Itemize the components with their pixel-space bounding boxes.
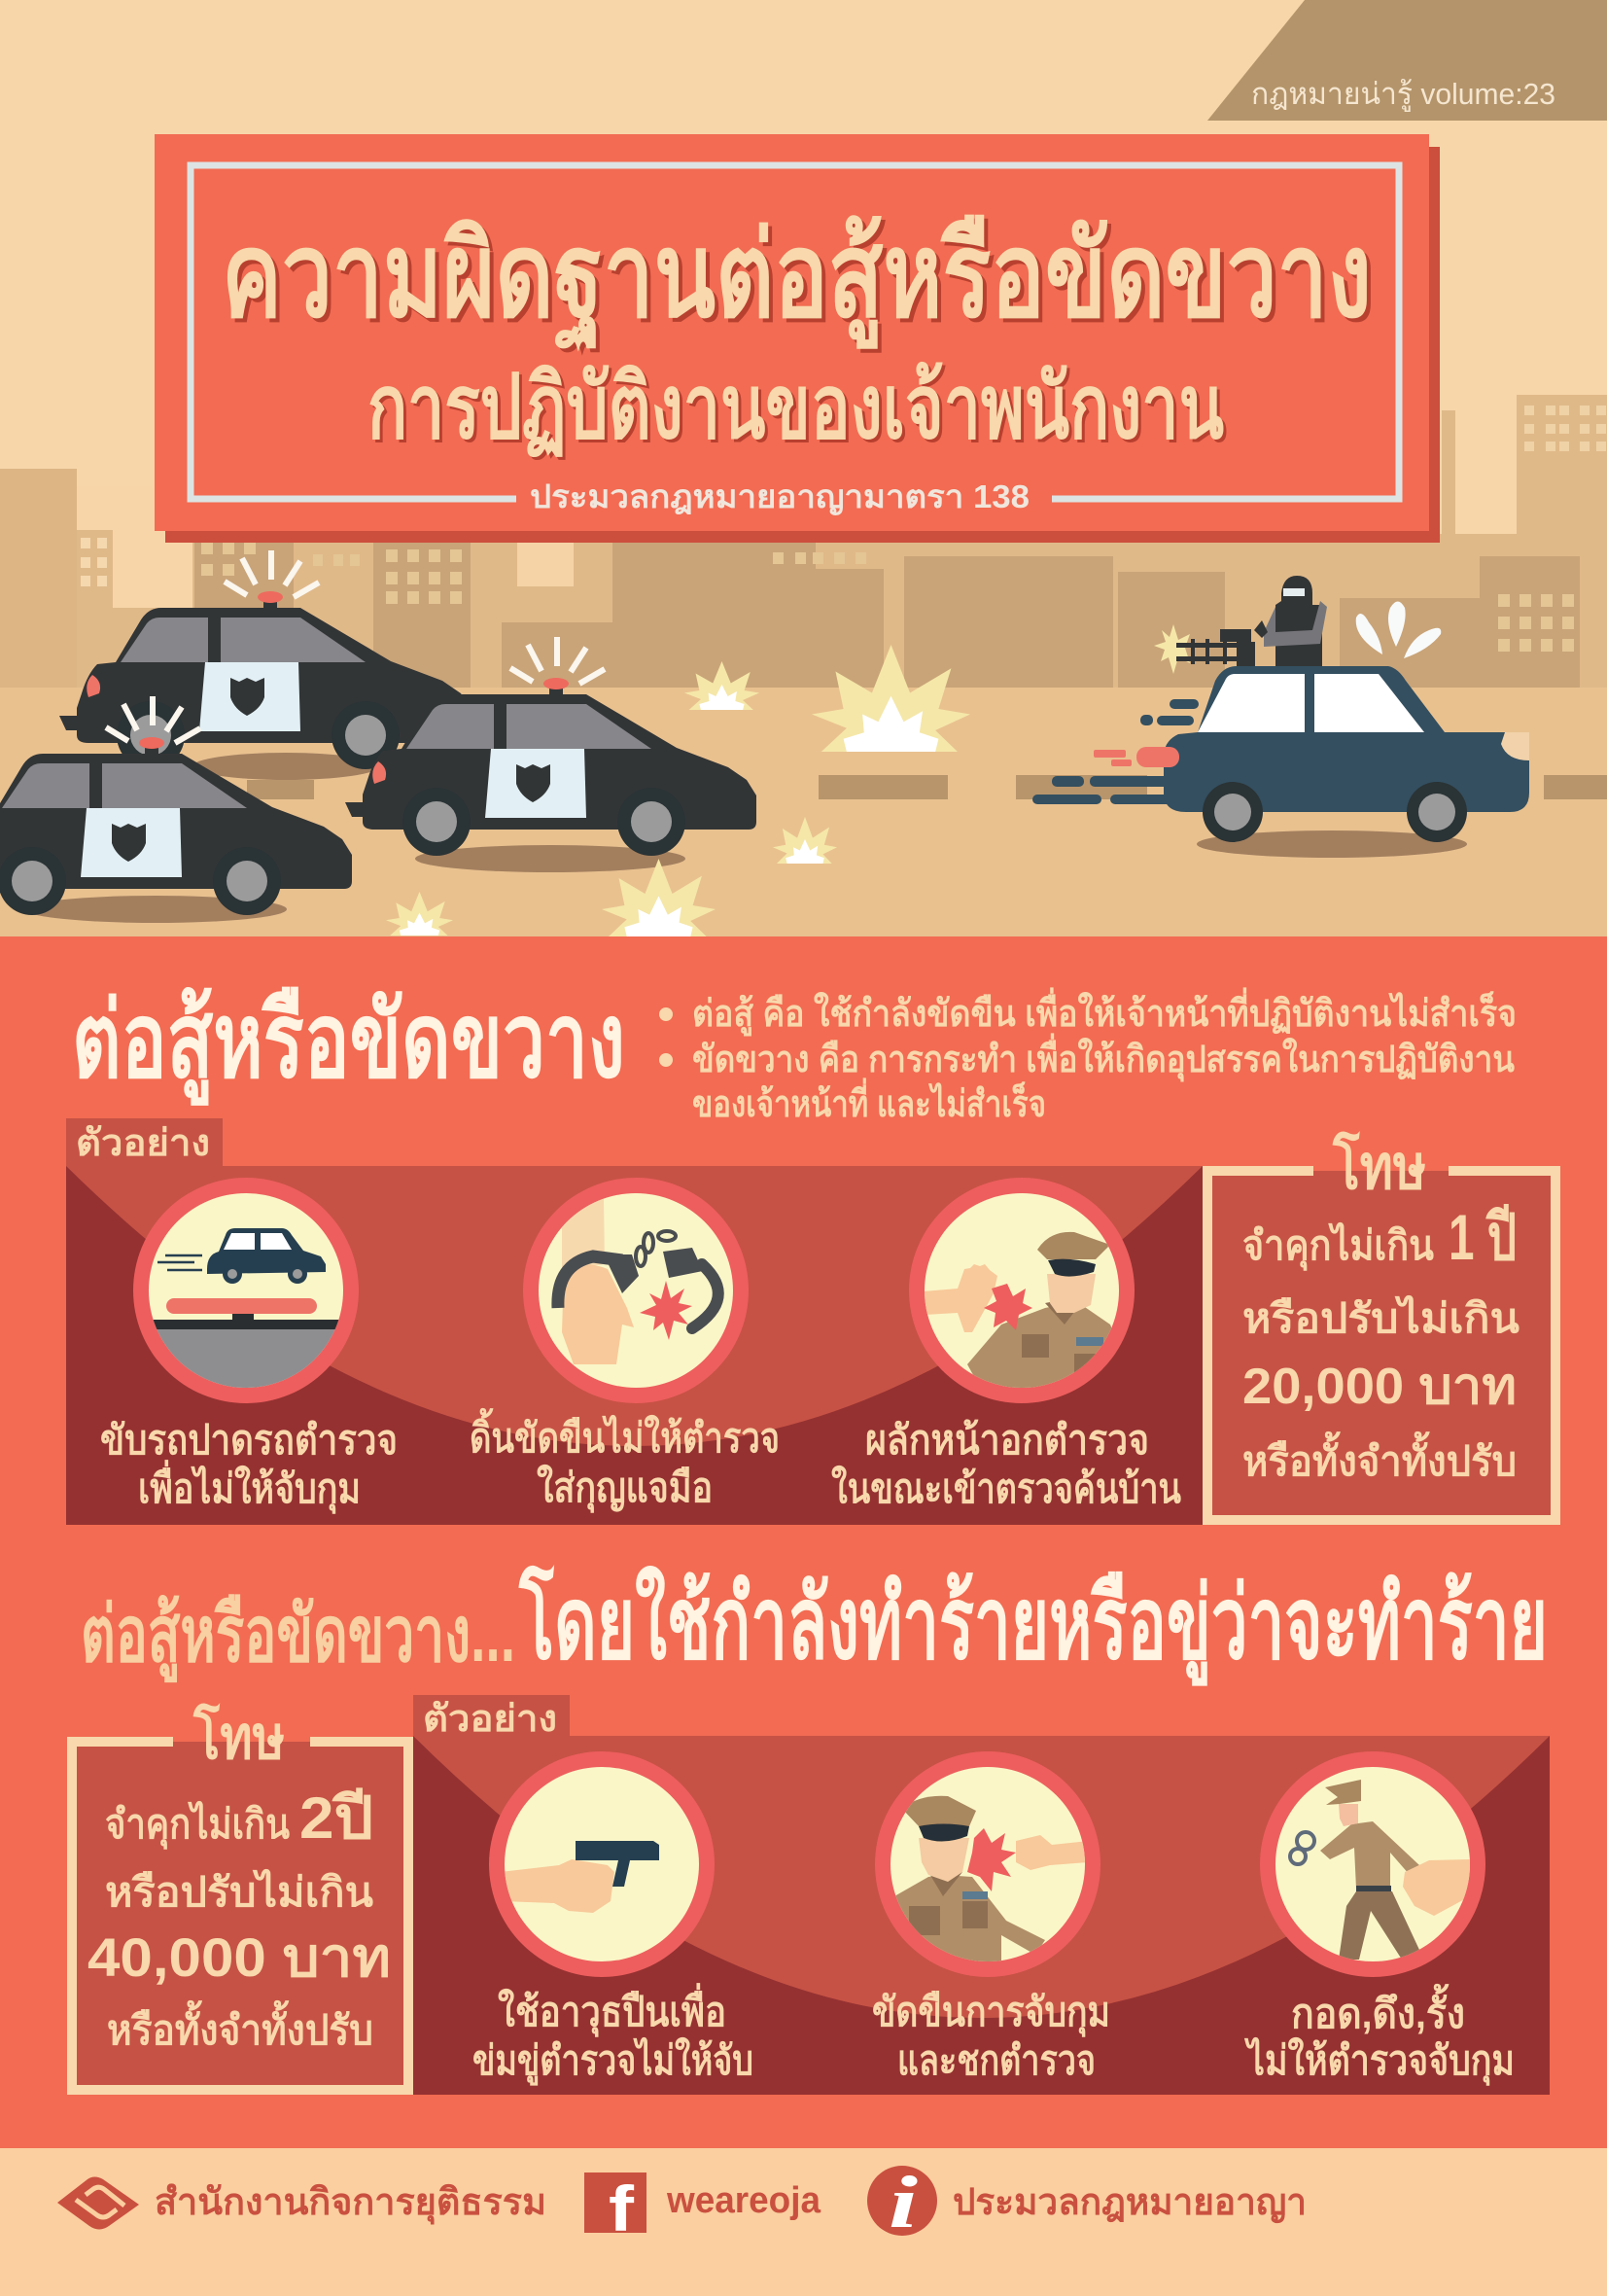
icon: officer held back <box>1260 1751 1485 1977</box>
captions: กอด,ดึง,รั้ง <box>1291 1983 1465 2036</box>
captions: ผลักหน้าอกตำรวจ <box>865 1417 1149 1463</box>
icon: pushing officer's chest <box>909 1178 1137 1403</box>
penalty box 2: หรือปรับไม่เกิน <box>105 1868 373 1915</box>
heading: section 2 <box>81 1565 1548 1686</box>
car body <box>1164 666 1529 812</box>
captions: และชกตำรวจ <box>897 2037 1096 2083</box>
icon: info <box>867 2162 937 2243</box>
penalty box 1: หรือปรับไม่เกิน <box>1242 1294 1520 1341</box>
getaway car with gunman <box>1032 576 1529 858</box>
road <box>0 688 1607 936</box>
captions: ข่มขู่ตำรวจไม่ให้จับ <box>472 2036 753 2086</box>
tail light <box>1094 747 1179 767</box>
captions: ไม่ให้ตำรวจจับกุม <box>1244 2036 1515 2086</box>
penalty box 2 <box>72 1702 408 2090</box>
explosion: upper centre <box>684 661 759 710</box>
penalty box 1: จำคุกไม่เกิน <box>1242 1221 1434 1271</box>
definitions <box>659 987 1517 1125</box>
title panel <box>155 134 1440 543</box>
ribbon: volume label <box>1207 0 1607 121</box>
definitions: ขัดขวาง คือ การกระทำ เพื่อให้เกิดอุปสรรคในการปฏิบัติงาน <box>692 1033 1515 1082</box>
penalty box 1: 20,000 บาท <box>1242 1359 1517 1415</box>
penalty box 1: โทษ <box>1332 1130 1426 1202</box>
penalty box 1 <box>1207 1130 1555 1520</box>
wheels <box>1203 782 1263 842</box>
police car: middle <box>345 637 756 872</box>
captions: เพื่อไม่ให้จับกุม <box>138 1460 361 1514</box>
speed lines <box>1032 699 1199 804</box>
label: office name: สำนักงานกิจการยุติธรรม <box>155 2182 546 2225</box>
captions: ขัดขืนการจับกุม <box>872 1989 1110 2037</box>
captions: ใส่กุญแจมือ <box>537 1464 713 1513</box>
headlight <box>1501 732 1529 760</box>
city skyline <box>0 395 1607 689</box>
footer band <box>0 2148 1607 2296</box>
icon: facebook <box>584 2172 646 2244</box>
heading: section 2: ต่อสู้หรือขัดขวาง... <box>81 1591 515 1683</box>
heading: section 1: ต่อสู้หรือขัดขวาง <box>72 981 625 1106</box>
ribbon: volume label: กฎหมายน่ารู้ volume:23 <box>1251 77 1555 112</box>
alarm drops above car <box>1356 601 1441 658</box>
penalty box 2: หรือทั้งจำทั้งปรับ <box>107 1999 373 2053</box>
penalty box 2: 40,000 บาท <box>87 1926 391 1988</box>
captions: ในขณะเข้าตรวจค้นบ้าน <box>831 1465 1181 1511</box>
panel: examples 1 <box>66 1118 1203 1525</box>
penalty box 1: หรือทั้งจำทั้งปรับ <box>1242 1431 1517 1484</box>
police car: rear <box>59 550 471 780</box>
definitions: ต่อสู้ คือ ใช้กำลังขัดขืน เพื่อให้เจ้าหน้าที่ปฏิบัติงานไม่สำเร็จ <box>692 987 1517 1037</box>
background: sky <box>0 0 1607 936</box>
background: red band <box>0 936 1607 2148</box>
windows <box>1198 674 1305 732</box>
explosion: bottom left <box>386 892 453 936</box>
label: facebook page: weareoja <box>666 2180 821 2221</box>
police car: front left <box>0 696 352 923</box>
captions: ใช้อาวุธปืนเพื่อ <box>498 1983 726 2037</box>
gunman <box>1176 576 1327 666</box>
captions <box>472 1983 1515 2086</box>
icon: info: i <box>889 2162 918 2243</box>
icon: hand with gun <box>489 1751 715 1977</box>
penalty box 2: โทษ <box>192 1702 285 1772</box>
icon: facebook: f <box>609 2172 635 2244</box>
subtitle: ประมวลกฎหมายอาญามาตรา 138 <box>530 478 1030 515</box>
muzzle flash <box>1154 624 1190 674</box>
icon: car cutting off police car <box>133 1178 359 1403</box>
panel: examples 2 <box>413 1695 1550 2095</box>
tab: examples label: ตัวอย่าง <box>423 1699 557 1740</box>
icon: OJA logo <box>57 2176 139 2229</box>
explosion: bottom centre <box>602 859 716 936</box>
captions: ขับรถปาดรถตำรวจ <box>100 1417 398 1463</box>
captions <box>100 1407 1181 1514</box>
tab: examples label: ตัวอย่าง <box>76 1123 210 1164</box>
icon: officer punched <box>875 1751 1100 1977</box>
penalty box 2: จำคุกไม่เกิน <box>105 1800 290 1850</box>
penalty box 2: 2ปี <box>299 1785 373 1851</box>
explosion: large centre <box>812 645 970 752</box>
explosion: lower right <box>773 817 837 864</box>
penalty box 1: 1 ปี <box>1449 1201 1517 1273</box>
tab: examples label <box>66 1118 223 1166</box>
definitions: ของเจ้าหน้าที่ และไม่สำเร็จ <box>692 1077 1046 1125</box>
icon: handcuffs resisted <box>523 1178 749 1403</box>
title line 2: การปฏิบัติงานของเจ้าพนักงาน <box>367 358 1224 458</box>
label: penal code: ประมวลกฎหมายอาญา <box>953 2182 1307 2223</box>
captions: ดิ้นขัดขืนไม่ให้ตำรวจ <box>470 1407 780 1461</box>
